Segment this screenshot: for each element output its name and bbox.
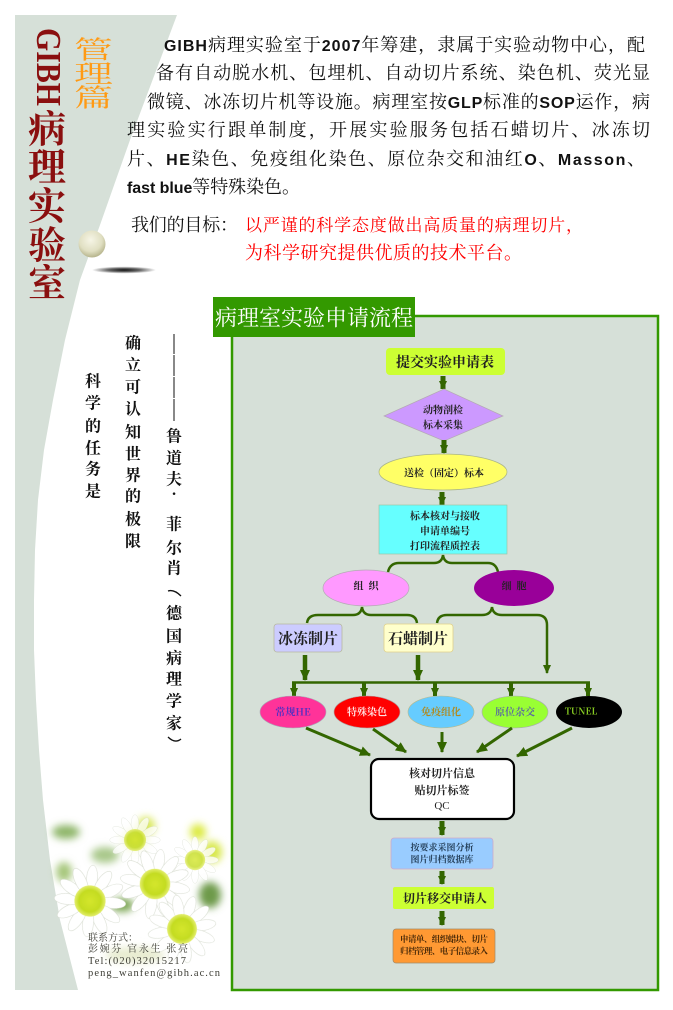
vertical quote: limits of the knowable world: 知 [125, 420, 141, 442]
intro text block: 理实验实行跟单制度，开展实验服务包括石蜡切片、冰冻切 [127, 116, 650, 142]
step: archive [393, 929, 495, 963]
contact information: 联系方式： [88, 929, 138, 944]
vertical quote: limits of the knowable world: 界 [125, 462, 141, 486]
step: archive: 申请单、组织蜡块、切片 [400, 933, 488, 945]
step: image analysis [391, 838, 493, 869]
node: TUNEL: TUNEL [565, 704, 597, 718]
step: verify information QC: QC [434, 800, 450, 812]
step: verify information QC: 核对切片信息 [409, 765, 476, 781]
heading: workflow title: 病理室实验申请流程 [215, 302, 413, 332]
step: check sample box [379, 505, 507, 554]
node: in situ hybridisation [482, 696, 548, 728]
connector: cell brace and arrow [437, 607, 547, 673]
vertical attribution: Virchow: 德 [166, 600, 183, 624]
node: immunohistochemistry [408, 696, 474, 728]
intro text block: fast blue等特殊染色。 [127, 173, 300, 199]
vertical quote: limits of the knowable world: 立 [125, 352, 141, 376]
step: frozen section: 冰冻制片 [278, 628, 338, 648]
vertical attribution: Virchow: 鲁 [166, 424, 182, 446]
arrow [440, 376, 446, 389]
arrows converging on QC box [306, 728, 572, 756]
node: immunohistochemistry: 免疫组化 [421, 704, 461, 718]
vertical quote: the task of science: 务 [85, 456, 101, 480]
vertical quote: limits of the knowable world: 限 [125, 528, 141, 552]
icon: decorative ball with shadow [78, 230, 156, 274]
vertical attribution: Virchow: 家 [166, 710, 182, 734]
step: necropsy diamond: 标本采集 [423, 416, 463, 432]
connector: tissue brace [307, 607, 417, 623]
vertical quote: limits of the knowable world: 极 [125, 506, 141, 530]
vertical quote: the task of science: 科 [85, 368, 101, 392]
intro text block [127, 31, 650, 199]
node: tissue: 组 织 [354, 578, 380, 592]
step: archive: 归档管理、电子信息录入 [400, 945, 488, 957]
goal statement: 我们的目标： [131, 211, 238, 237]
panel: application workflow [232, 316, 658, 990]
step: verify information QC [371, 759, 514, 819]
goal statement: 为科学研究提供优质的技术平台。 [245, 239, 522, 265]
step: paraffin section [384, 624, 453, 652]
vertical title [28, 28, 68, 308]
step: image analysis: 按要求采图分析 [410, 840, 474, 854]
step: deliver slides: 切片移交申请人 [403, 890, 487, 906]
goal statement: 以严谨的科学态度做出高质量的病理切片， [245, 211, 583, 236]
intro text block: 微镜、冰冻切片机等设施。病理室按GLP标准的SOP运作，病 [147, 88, 650, 114]
vertical quote: limits of the knowable world: 确 [125, 330, 141, 354]
node: tissue [323, 570, 409, 606]
vertical quote: limits of the knowable world [125, 330, 141, 552]
vertical title: 验 [28, 214, 66, 270]
intro text block: GIBH病理实验室于2007年筹建，隶属于实验动物中心，配 [164, 31, 645, 57]
node: in situ hybridisation: 原位杂交 [495, 704, 536, 718]
vertical title: 实 [28, 176, 67, 230]
step: deliver slides [393, 887, 494, 909]
node: cell: 细 胞 [502, 578, 526, 592]
contact information [88, 929, 221, 979]
step: submit form [386, 348, 505, 375]
vertical attribution: Virchow: 病 [166, 646, 182, 668]
vertical quote: the task of science: 是 [85, 478, 101, 502]
vertical title: 病 [28, 98, 66, 154]
vertical quote: the task of science: 的 [85, 414, 101, 436]
arrow [440, 911, 444, 925]
node: routine HE: 常规HE [275, 704, 311, 718]
contact information: 彭婉芬 官永生 张亮 [88, 940, 188, 955]
subtitle: management section [74, 30, 113, 114]
vertical quote: the task of science [85, 368, 101, 502]
vertical attribution: Virchow: 学 [166, 688, 182, 712]
vertical title: GIBH [29, 28, 68, 106]
step: check sample box: 标本核对与接收 [410, 508, 480, 522]
arrow [416, 655, 420, 680]
vertical quote: limits of the knowable world: 认 [125, 396, 141, 420]
arrow [440, 821, 444, 835]
step: verify information QC: 贴切片标签 [414, 782, 470, 798]
step: check sample box: 打印流程质控表 [410, 538, 480, 552]
step: send sample ellipse: 送检（固定）标本 [404, 464, 484, 480]
step: frozen section [274, 624, 342, 652]
subtitle: management section: 管 [74, 30, 113, 66]
vertical attribution: Virchow: 肖 [166, 556, 182, 578]
intro text block: 片、HE染色、免疫组化染色、原位杂交和油红O、Masson、 [127, 145, 645, 171]
vertical quote: limits of the knowable world: 的 [125, 484, 141, 506]
flower photo [51, 815, 226, 973]
node: routine HE [260, 696, 326, 728]
vertical attribution: Virchow: 道 [166, 446, 182, 468]
step: paraffin section: 石蜡制片 [388, 628, 448, 648]
vertical attribution: Virchow: · [171, 482, 177, 504]
node: special stain [334, 696, 400, 728]
step: necropsy diamond: 动物剖检 [423, 402, 463, 416]
step: check sample box: 申请单编号 [420, 522, 470, 538]
step: send sample ellipse [379, 454, 507, 490]
vertical quote: limits of the knowable world: 可 [125, 374, 141, 398]
vertical quote: the task of science: 学 [85, 390, 101, 414]
subtitle: management section: 理 [74, 54, 113, 90]
contact information: peng_wanfen@gibh.ac.cn [88, 968, 221, 979]
vertical attribution: Virchow: 菲 [166, 512, 182, 534]
subtitle: management section: 篇 [74, 78, 113, 114]
distribution bar with five arrows [292, 682, 590, 696]
node: special stain: 特殊染色 [347, 704, 387, 718]
connector: brace to tissue and cell [388, 555, 498, 572]
vertical title: 室 [28, 252, 66, 308]
arrow [442, 440, 446, 453]
arrow [440, 871, 444, 884]
vertical quote: the task of science: 任 [85, 436, 101, 458]
goal statement [131, 211, 583, 265]
vertical quote: limits of the knowable world: 世 [125, 442, 141, 464]
intro text block: 备有自动脱水机、包埋机、自动切片系统、染色机、荧光显 [156, 59, 650, 85]
contact information: Tel:(020)32015217 [88, 956, 186, 967]
vertical attribution: Virchow: 尔 [166, 536, 183, 558]
step: submit form: 提交实验申请表 [396, 352, 494, 372]
arrow [440, 492, 444, 505]
step: image analysis: 图片归档数据库 [410, 852, 474, 866]
left curved panel [15, 15, 177, 990]
arrow [303, 655, 307, 680]
flowchart [260, 348, 622, 963]
node: cell [474, 570, 554, 606]
vertical title: 理 [28, 136, 66, 192]
vertical attribution: Virchow: 理 [166, 666, 182, 690]
node: TUNEL [556, 696, 622, 728]
step: necropsy diamond [384, 389, 503, 441]
vertical attribution: Virchow: 国 [166, 624, 182, 646]
vertical attribution: Virchow: 夫 [166, 466, 182, 490]
vertical attribution: Virchow [166, 334, 183, 741]
